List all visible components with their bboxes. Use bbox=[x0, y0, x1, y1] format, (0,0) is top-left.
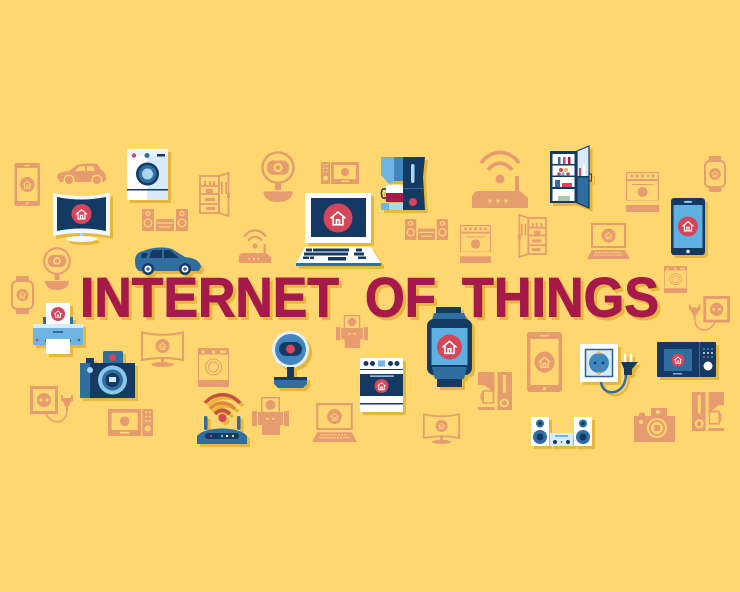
icon: salmon watch right bbox=[705, 156, 725, 192]
icon: salmon phone right bbox=[527, 332, 562, 392]
icon: salmon laptop bottom bbox=[312, 404, 357, 442]
icon: salmon router large bbox=[472, 152, 528, 208]
icon: salmon TV bottom bbox=[424, 414, 459, 444]
icon: salmon TV with remote bottom bbox=[108, 409, 153, 436]
icon: salmon TV with remote top bbox=[321, 162, 359, 184]
icon: salmon socket top right bbox=[689, 296, 730, 330]
icon: salmon coffee maker right bbox=[692, 392, 724, 431]
icon: salmon TV left bbox=[142, 332, 183, 367]
icon: salmon car bbox=[57, 163, 106, 186]
icon: salmon camera bbox=[634, 408, 675, 442]
icon: camera bbox=[80, 351, 135, 398]
icon: salmon phone left bbox=[14, 163, 40, 206]
icon: laptop bbox=[296, 193, 381, 266]
title bbox=[80, 266, 659, 328]
icon: salmon washer left bbox=[198, 348, 229, 387]
icon: salmon watch left bbox=[12, 276, 33, 314]
icon: salmon webcam left bbox=[44, 248, 70, 290]
icon: salmon fridge right bbox=[518, 215, 546, 257]
title: THINGS bbox=[462, 266, 659, 328]
icon: salmon webcam top bbox=[262, 152, 294, 202]
icon: washing machine bbox=[127, 149, 168, 200]
icon: salmon fridge left bbox=[200, 173, 230, 216]
icon: oven bbox=[360, 358, 403, 412]
title: OF bbox=[365, 266, 436, 328]
icon: curved TV bbox=[53, 193, 110, 242]
icon: salmon oven centre bbox=[460, 225, 491, 263]
icon: salmon oven right bbox=[626, 172, 659, 212]
icon: microwave bbox=[657, 342, 716, 377]
icon: wifi router bbox=[197, 395, 247, 444]
icon: salmon printer bottom bbox=[252, 397, 289, 435]
icon: salmon stereo left bbox=[142, 209, 188, 231]
icon: smartwatch bbox=[427, 307, 472, 387]
icon: stereo system bbox=[531, 417, 592, 446]
icon: salmon socket left bbox=[30, 386, 73, 422]
icon: salmon washer right bbox=[664, 266, 687, 293]
icon: salmon coffee maker centre bbox=[478, 372, 512, 410]
icon: salmon laptop right bbox=[587, 224, 630, 259]
icon: salmon router small bbox=[239, 230, 271, 263]
icon: smartphone bbox=[671, 198, 705, 255]
icon: salmon stereo centre bbox=[405, 219, 448, 240]
icon: coffee maker bbox=[381, 157, 425, 210]
icon: car bbox=[135, 247, 201, 275]
icon: wall socket with plug bbox=[580, 344, 638, 392]
icon: open fridge bbox=[550, 146, 592, 208]
icon: webcam bbox=[272, 331, 309, 388]
icon: printer bbox=[33, 303, 83, 354]
icon: salmon printer centre bbox=[336, 315, 368, 348]
title: INTERNET bbox=[80, 266, 339, 328]
